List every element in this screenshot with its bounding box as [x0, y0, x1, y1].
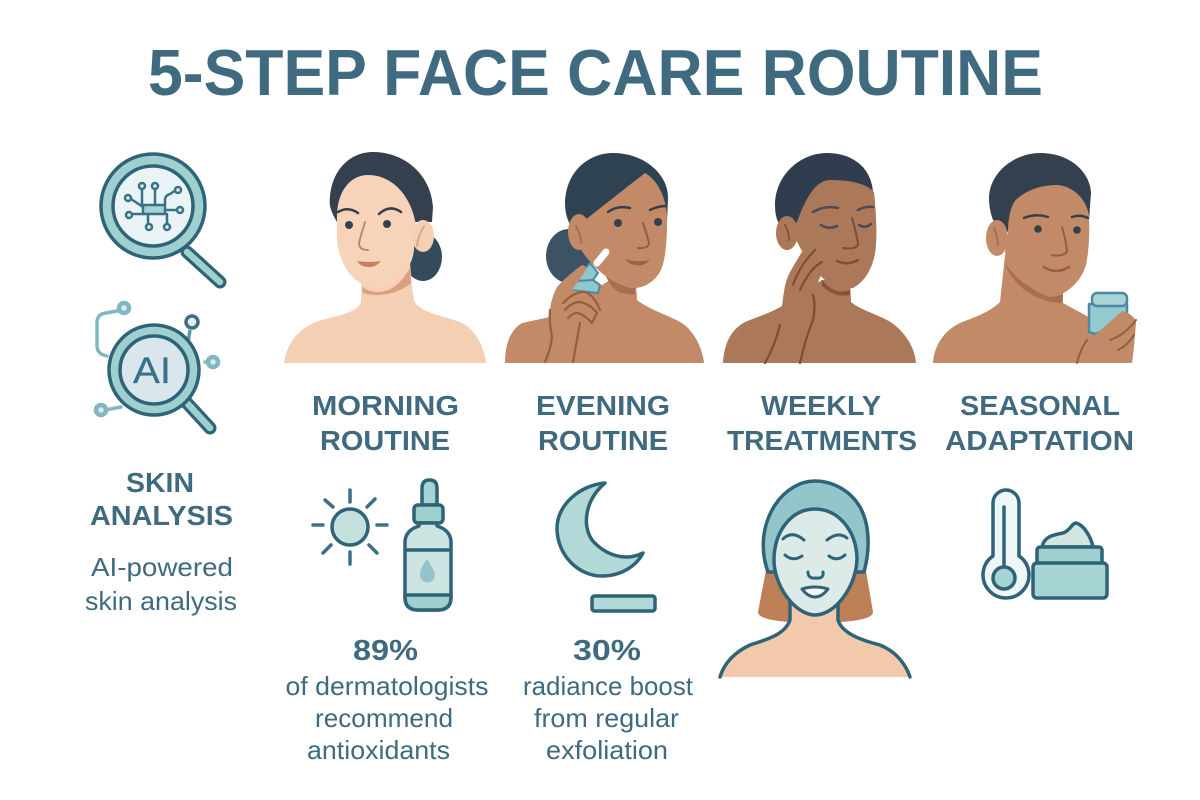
title: 5-STEP FACE CARE ROUTINE — [148, 36, 1043, 109]
heading: weekly treatments: TREATMENTS — [727, 425, 917, 456]
stat: 89 percent antioxidants — [286, 635, 488, 765]
heading: seasonal adaptation: ADAPTATION — [945, 425, 1134, 456]
text: skin analysis description: skin analysis — [85, 586, 237, 616]
text: skin analysis description: AI-powered — [91, 552, 233, 582]
figure: evening routine woman with dropper — [505, 153, 704, 363]
icon: sun — [313, 490, 387, 564]
icon: thermometer — [983, 490, 1029, 598]
stat: 30 percent radiance: exfoliation — [546, 735, 668, 765]
figure: morning routine woman — [284, 152, 486, 363]
figure: weekly treatments man touching face — [723, 153, 916, 363]
heading: evening routine — [536, 390, 670, 456]
icon: AI magnifier with nodes — [96, 303, 218, 428]
heading: morning routine: ROUTINE — [320, 425, 450, 456]
icon: jar in hand — [1077, 293, 1136, 363]
stat: 89 percent antioxidants: antioxidants — [307, 735, 450, 765]
icon: AI magnifier with nodes: AI — [133, 350, 171, 391]
icon: crescent moon with bar — [557, 483, 655, 611]
heading: skin analysis: SKIN — [126, 467, 194, 498]
heading: skin analysis: ANALYSIS — [90, 500, 233, 531]
stat: 30 percent radiance — [523, 635, 694, 765]
heading: morning routine: MORNING — [312, 390, 459, 421]
panel: skin analysis — [85, 154, 237, 616]
stat: 89 percent antioxidants: recommend — [315, 703, 453, 733]
heading: skin analysis — [90, 467, 233, 531]
stat: 89 percent antioxidants: 89% — [353, 635, 418, 667]
icon: face mask woman — [720, 481, 910, 677]
heading: evening routine: ROUTINE — [538, 425, 668, 456]
icon: cream jar — [1033, 523, 1107, 598]
text: skin analysis description — [85, 552, 237, 616]
figure: seasonal adaptation man with jar — [933, 153, 1136, 363]
stat: 30 percent radiance: radiance boost — [523, 671, 694, 701]
icon: serum bottle — [405, 480, 451, 610]
heading: weekly treatments — [727, 390, 917, 456]
heading: morning routine — [312, 390, 459, 456]
stat: 30 percent radiance: 30% — [573, 635, 641, 667]
icon: magnifier with circuit — [101, 154, 220, 282]
heading: seasonal adaptation — [945, 390, 1134, 456]
stat: 89 percent antioxidants: of dermatologists — [286, 671, 488, 701]
heading: evening routine: EVENING — [536, 390, 670, 421]
icon: dropper bottle in hand — [545, 252, 606, 363]
stat: 30 percent radiance: from regular — [534, 703, 679, 733]
heading: seasonal adaptation: SEASONAL — [960, 390, 1120, 421]
heading: weekly treatments: WEEKLY — [761, 390, 881, 421]
